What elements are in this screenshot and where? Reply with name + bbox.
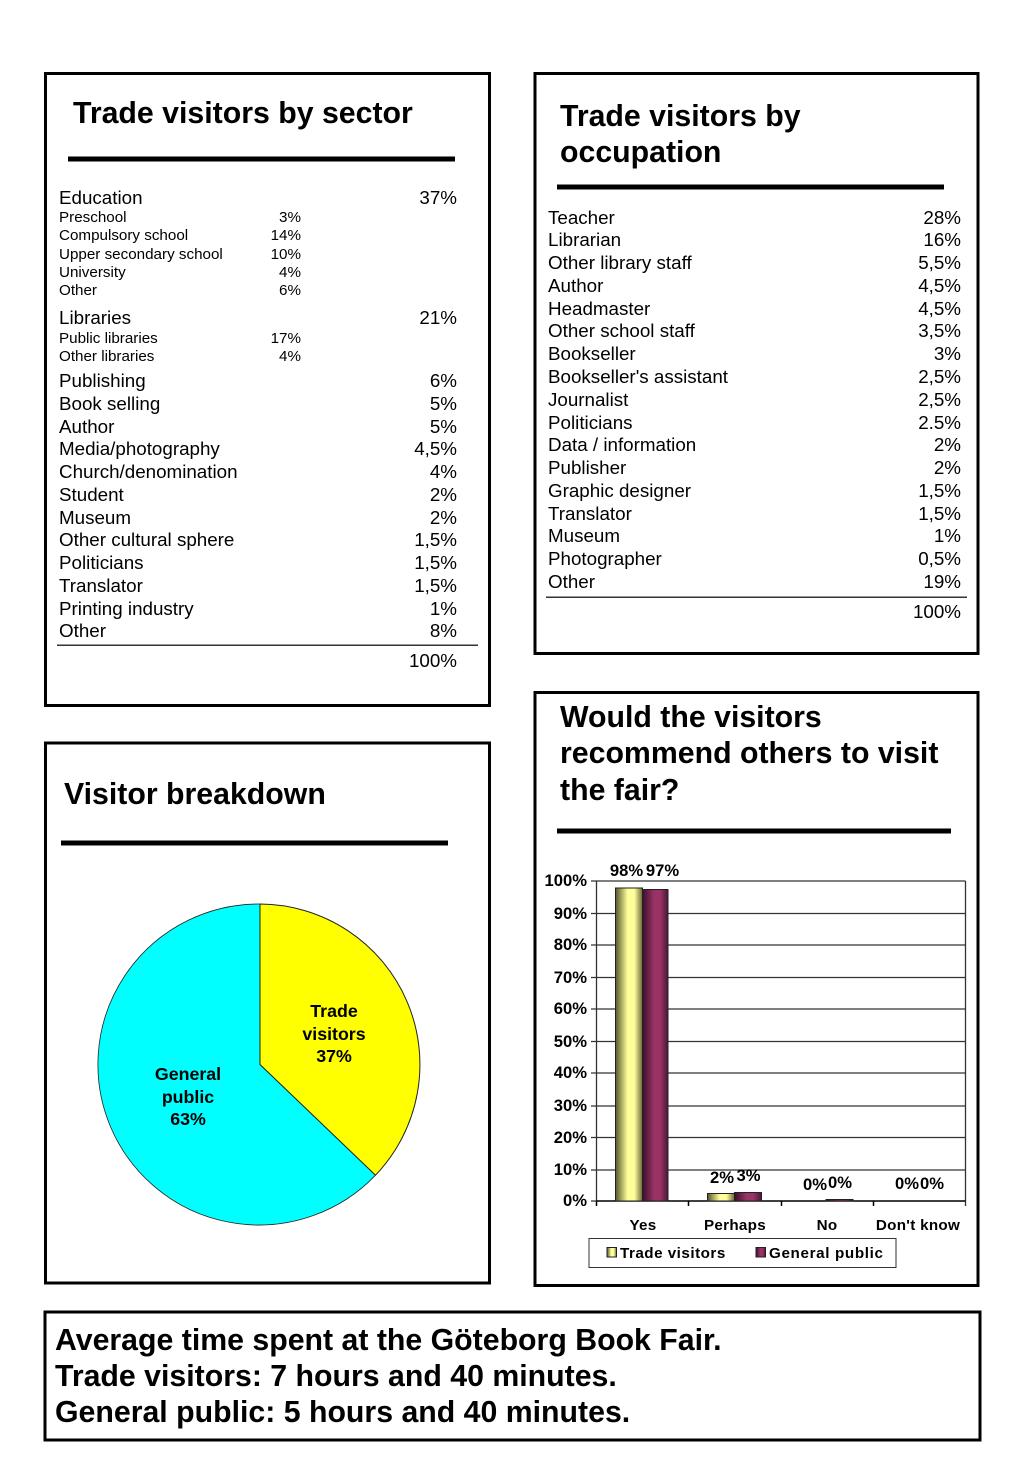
sector table: Student <box>59 484 125 505</box>
y axis labels: 40% <box>554 1063 587 1082</box>
data labels: 3% <box>737 1166 761 1185</box>
sector table: 6% <box>279 282 301 299</box>
occupation table: 2.5% <box>918 412 961 433</box>
panel: trade visitors by sector <box>46 74 490 706</box>
sector table: Libraries <box>59 307 131 328</box>
y axis labels: 30% <box>554 1096 587 1115</box>
sector table: Museum <box>59 507 131 528</box>
heading: recommendation question: Would the visitors <box>560 701 822 734</box>
legend: Trade visitors <box>620 1245 726 1262</box>
sector table: 1,5% <box>414 575 457 596</box>
sector table: 2% <box>430 507 457 528</box>
data labels: 0% <box>803 1175 827 1194</box>
occupation table: Bookseller's assistant <box>548 366 729 387</box>
sector table: Preschool <box>59 209 127 226</box>
occupation table: 2,5% <box>918 389 961 410</box>
text: average time spent: Average time spent at the Göteborg Book Fair. <box>55 1324 722 1357</box>
sector table: 4,5% <box>414 438 457 459</box>
heading: trade visitors by occupation: occupation <box>560 136 721 169</box>
occupation table: 16% <box>923 229 961 250</box>
sector table: Other <box>59 282 97 299</box>
legend: General public <box>769 1245 884 1262</box>
sector table: Book selling <box>59 393 160 414</box>
sector table: 6% <box>430 370 457 391</box>
panel: average time spent <box>45 1312 980 1440</box>
slice: general public 63% <box>98 904 376 1225</box>
sector table: Public libraries <box>59 330 158 347</box>
slice: trade visitors 37% <box>260 904 420 1175</box>
occupation table: Librarian <box>548 229 621 250</box>
data labels: 0% <box>895 1174 919 1193</box>
occupation table: Photographer <box>548 548 662 569</box>
sector table: 4% <box>430 461 457 482</box>
occupation table: 2% <box>934 434 961 455</box>
y axis labels: 80% <box>554 935 587 954</box>
sector table: 3% <box>279 209 301 226</box>
bar chart <box>545 861 966 1268</box>
sector table: Education <box>59 187 143 208</box>
heading: recommendation question: recommend others to visit <box>560 737 938 770</box>
occupation table: Graphic designer <box>548 480 691 501</box>
occupation table: Headmaster <box>548 298 650 319</box>
occupation table: 2% <box>934 457 961 478</box>
y axis labels: 60% <box>554 999 587 1018</box>
occupation table: 5,5% <box>918 252 961 273</box>
occupation table: 2,5% <box>918 366 961 387</box>
data labels: 0% <box>920 1174 944 1193</box>
sector table: 4% <box>279 348 301 365</box>
y axis labels: 50% <box>554 1032 587 1051</box>
occupation table: Other school staff <box>548 320 696 341</box>
heading: visitor breakdown: Visitor breakdown <box>64 778 326 811</box>
bars: trade visitors <box>616 888 734 1201</box>
sector table: Church/denomination <box>59 461 238 482</box>
label: general public: 63% <box>170 1109 206 1129</box>
heading: trade visitors by sector: Trade visitors by sector <box>73 97 413 130</box>
x axis labels: No <box>817 1217 837 1234</box>
heading: trade visitors by occupation: Trade visitors by <box>560 100 801 133</box>
occupation table: 3% <box>934 343 961 364</box>
sector table: 14% <box>271 227 301 244</box>
data labels: 0% <box>828 1173 852 1192</box>
occupation table: Data / information <box>548 434 696 455</box>
panel: would the visitors recommend <box>535 692 978 1286</box>
occupation table: Teacher <box>548 207 615 228</box>
y axis labels: 10% <box>554 1160 587 1179</box>
data labels: 97% <box>646 861 679 880</box>
occupation table: Museum <box>548 525 620 546</box>
sector table: 8% <box>430 620 457 641</box>
sector table: 100% <box>409 650 457 671</box>
occupation table: 3,5% <box>918 320 961 341</box>
x axis labels <box>629 1217 960 1234</box>
occupation table: 0,5% <box>918 548 961 569</box>
sector table: Publishing <box>59 370 146 391</box>
text: average time spent: General public: 5 hours and 40 minutes. <box>55 1396 630 1429</box>
x axis labels: Yes <box>629 1217 657 1234</box>
data labels: 2% <box>710 1168 734 1187</box>
sector table: Other libraries <box>59 348 155 365</box>
sector table <box>59 187 457 671</box>
x axis labels: Don't know <box>876 1217 960 1234</box>
sector table: 4% <box>279 264 301 281</box>
occupation table: 100% <box>913 601 961 622</box>
occupation table: Politicians <box>548 412 633 433</box>
data labels <box>610 861 944 1194</box>
occupation table: 1,5% <box>918 503 961 524</box>
occupation table: Other library staff <box>548 252 692 273</box>
occupation table: 28% <box>923 207 961 228</box>
sector table: Politicians <box>59 552 144 573</box>
occupation table: Bookseller <box>548 343 636 364</box>
y axis labels: 0% <box>563 1191 587 1210</box>
sector table: 1% <box>430 598 457 619</box>
y axis labels <box>545 871 587 1210</box>
sector table: Other cultural sphere <box>59 529 234 550</box>
sector table: Upper secondary school <box>59 246 223 263</box>
pie chart <box>98 904 420 1225</box>
sector table: 1,5% <box>414 552 457 573</box>
label: trade visitors: visitors <box>302 1024 366 1044</box>
sector table: Media/photography <box>59 438 220 459</box>
occupation table: 1,5% <box>918 480 961 501</box>
sector table: 21% <box>419 307 457 328</box>
sector table: Translator <box>59 575 143 596</box>
sector table: Author <box>59 416 114 437</box>
y axis labels: 70% <box>554 968 587 987</box>
bars: general public <box>642 890 853 1201</box>
heading: recommendation question: the fair? <box>560 774 679 807</box>
label: general public: public <box>162 1087 214 1107</box>
sector table: 1,5% <box>414 529 457 550</box>
sector table: Compulsory school <box>59 227 188 244</box>
label: trade visitors: Trade <box>310 1001 358 1021</box>
y axis labels: 20% <box>554 1128 587 1147</box>
occupation table: 4,5% <box>918 298 961 319</box>
occupation table: Other <box>548 571 595 592</box>
y axis labels: 90% <box>554 904 587 923</box>
sector table: 37% <box>419 187 457 208</box>
occupation table <box>548 207 961 622</box>
occupation table: Publisher <box>548 457 626 478</box>
panel: visitor breakdown <box>46 743 490 1283</box>
occupation table: 4,5% <box>918 275 961 296</box>
occupation table: Author <box>548 275 603 296</box>
sector table: 10% <box>271 246 301 263</box>
sector table: Other <box>59 620 106 641</box>
occupation table: Translator <box>548 503 632 524</box>
sector table: Printing industry <box>59 598 194 619</box>
y axis labels: 100% <box>545 871 587 890</box>
sector table: 5% <box>430 416 457 437</box>
sector table: University <box>59 264 126 281</box>
label: trade visitors: 37% <box>316 1046 352 1066</box>
label: general public: General <box>155 1064 221 1084</box>
sector table: 5% <box>430 393 457 414</box>
panel: trade visitors by occupation <box>535 74 978 654</box>
occupation table: 1% <box>934 525 961 546</box>
text: average time spent: Trade visitors: 7 hours and 40 minutes. <box>55 1360 617 1393</box>
occupation table: Journalist <box>548 389 629 410</box>
data labels: 98% <box>610 861 643 880</box>
legend <box>589 1238 896 1268</box>
sector table: 17% <box>271 330 301 347</box>
x axis labels: Perhaps <box>704 1217 766 1234</box>
sector table: 2% <box>430 484 457 505</box>
occupation table: 19% <box>923 571 961 592</box>
